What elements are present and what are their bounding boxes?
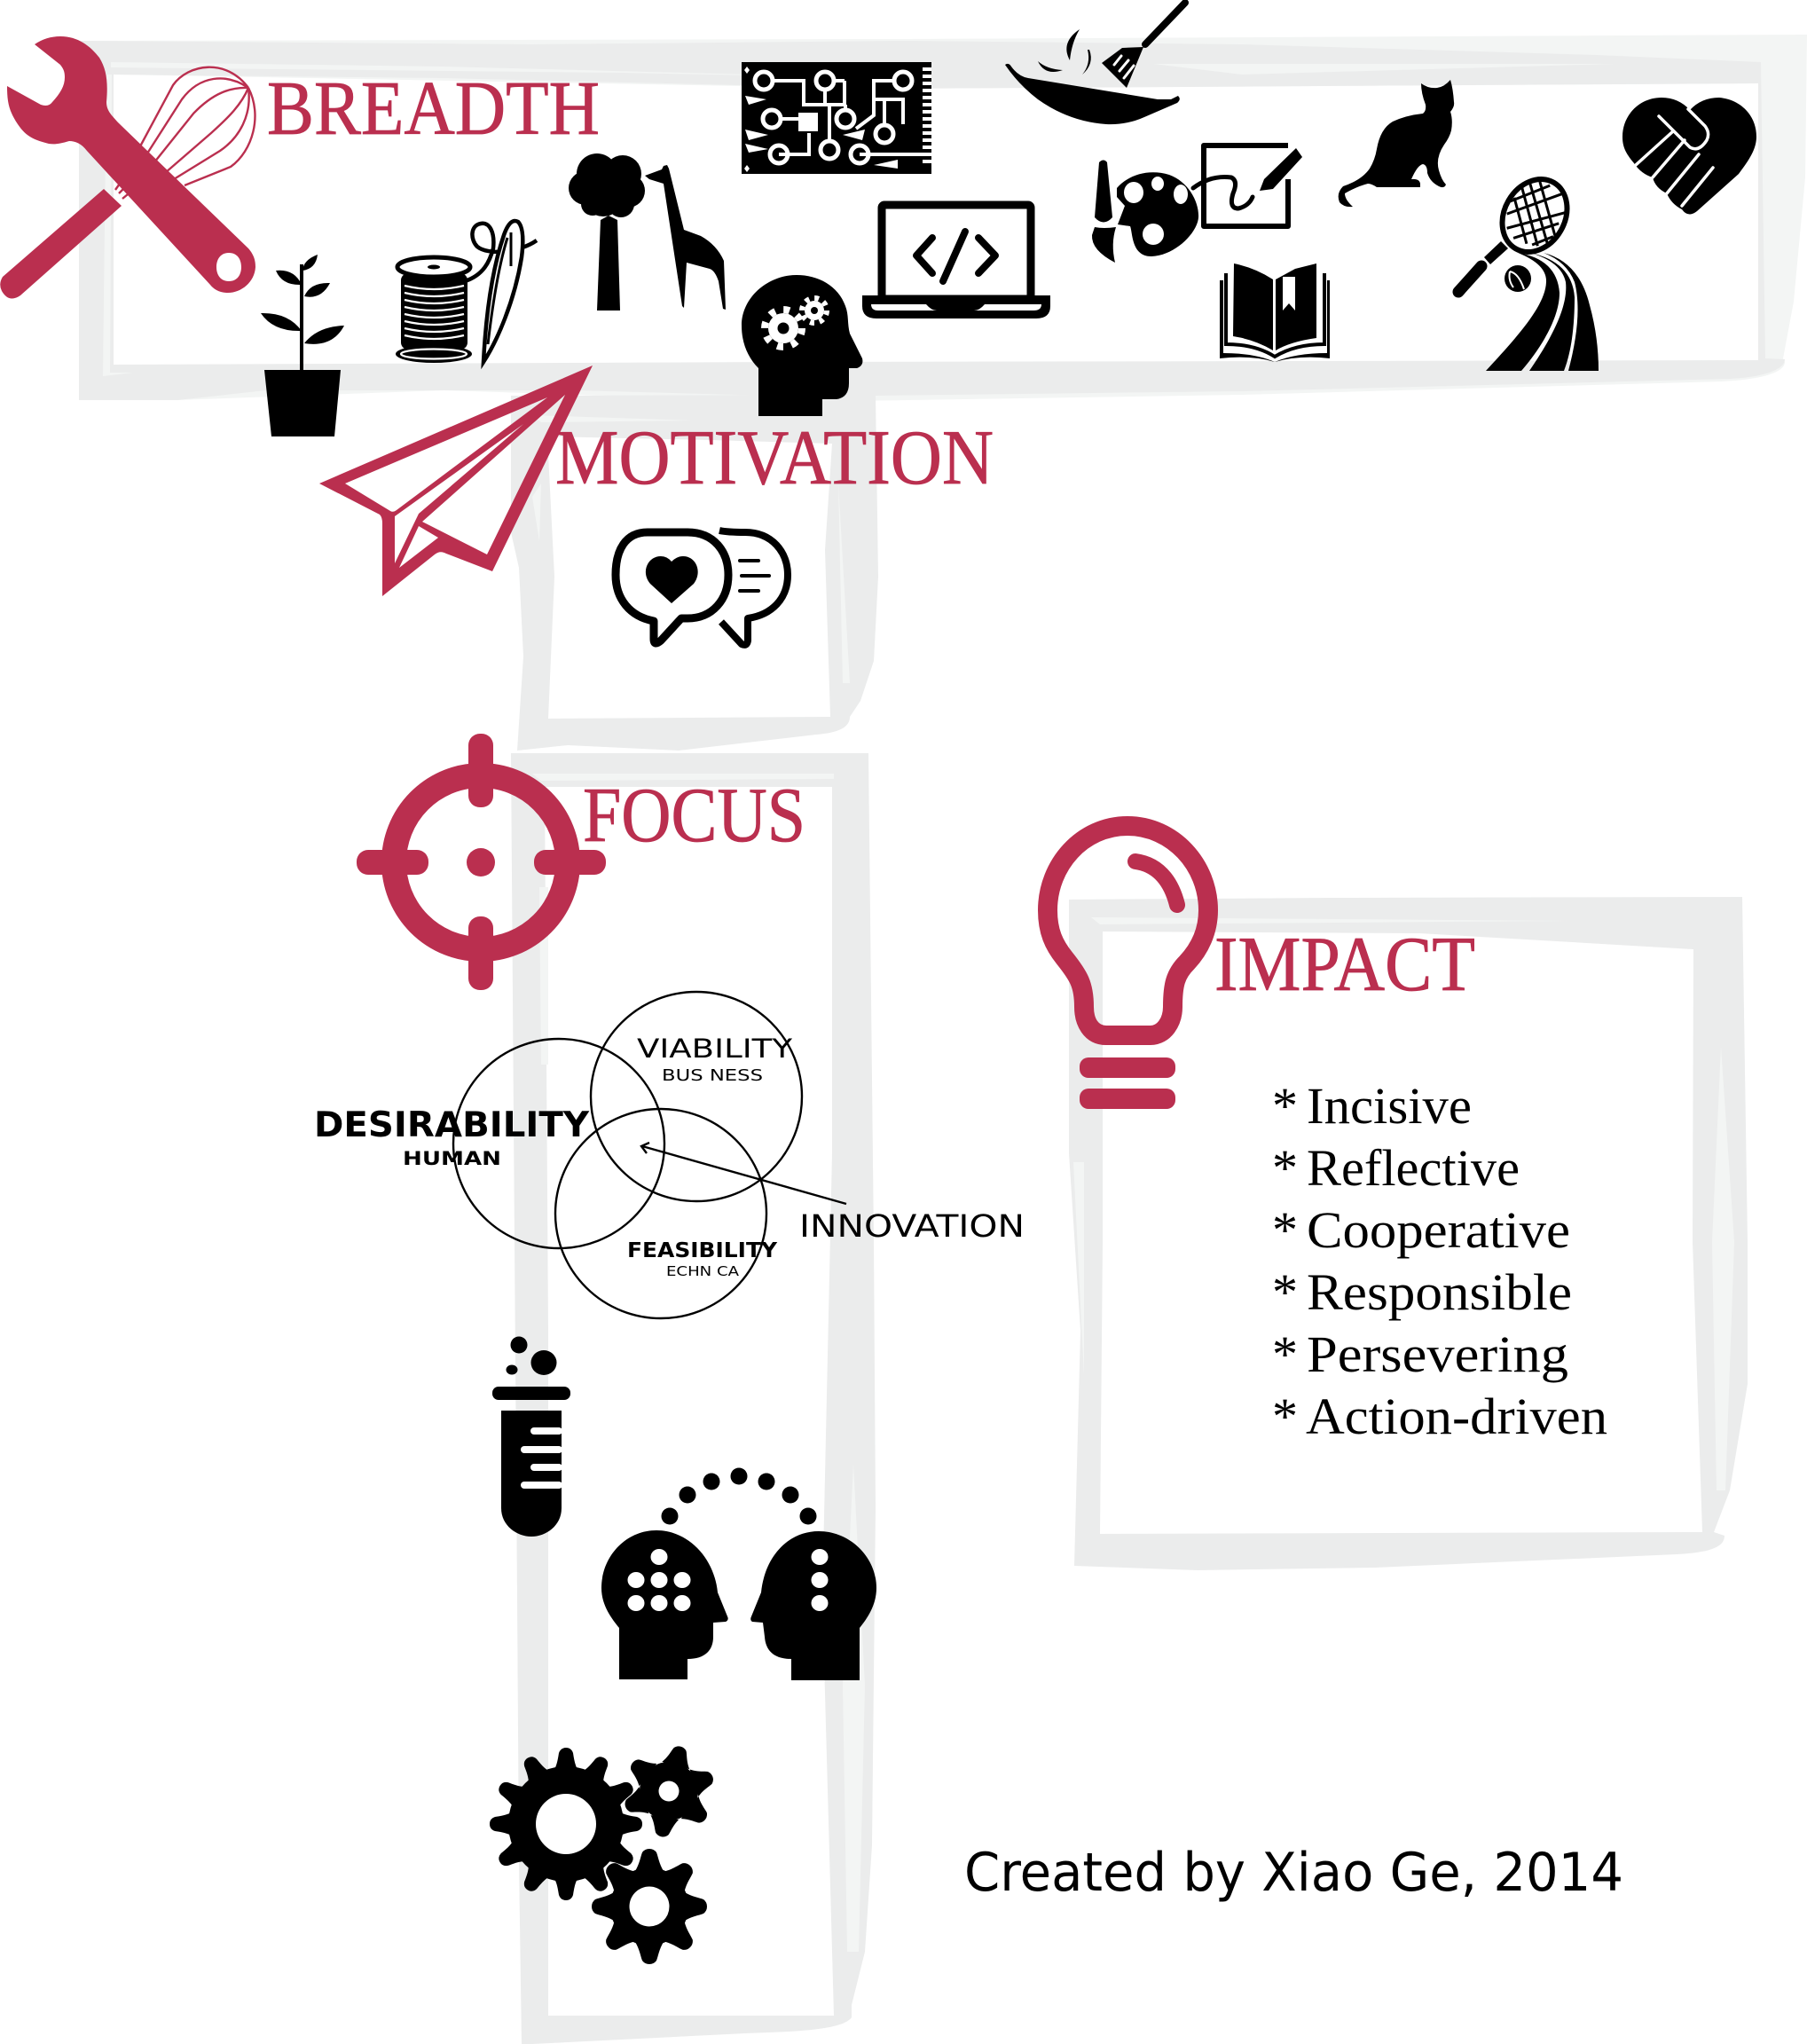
frame: breadth brush-stroke border bbox=[79, 35, 1807, 402]
icon: paper plane bbox=[319, 366, 593, 596]
panel: motivation section content bbox=[319, 366, 994, 645]
label: human: HUMAN bbox=[403, 1148, 501, 1169]
text block: impact traits list: * bbox=[1272, 1263, 1298, 1321]
icon: open book bbox=[1220, 263, 1330, 362]
heading: FOCUS: FOCUS bbox=[583, 773, 805, 859]
chart: innovation venn diagram bbox=[314, 992, 1025, 1318]
icon: three gears bbox=[490, 1743, 717, 1964]
frame: focus brush-stroke border bbox=[511, 753, 876, 2044]
icon: paint palette and brush bbox=[1092, 145, 1302, 263]
icon: giraffe bbox=[645, 165, 726, 310]
heading: MOTIVATION: MOTIVATION bbox=[555, 415, 994, 501]
text block: impact traits list: Action-driven bbox=[1306, 1388, 1607, 1445]
icon: target crosshair bbox=[357, 734, 606, 990]
panel: breadth section content bbox=[0, 3, 1756, 436]
icon: tree bbox=[569, 153, 645, 311]
heading: BREADTH: BREADTH bbox=[267, 65, 600, 151]
heading: IMPACT: IMPACT bbox=[1214, 922, 1475, 1008]
text block: impact traits list: Cooperative bbox=[1307, 1201, 1570, 1259]
icon: head with gears bbox=[742, 275, 862, 416]
icon: test tube bbox=[492, 1336, 570, 1537]
icon: cat silhouette bbox=[1339, 80, 1454, 207]
icon: two heads exchanging ideas bbox=[601, 1467, 876, 1680]
frame: motivation brush-stroke border bbox=[511, 395, 878, 751]
label: technical: ECHN CA bbox=[666, 1263, 740, 1279]
panel: focus section content bbox=[314, 734, 1025, 1964]
text block: impact traits list: Reflective bbox=[1307, 1139, 1520, 1197]
icon: speech bubbles with heart bbox=[616, 531, 788, 645]
label: feasibility: FEASIBILITY bbox=[627, 1239, 777, 1262]
icon: plant in a pot bbox=[261, 255, 344, 436]
text block: impact traits list: * bbox=[1272, 1388, 1298, 1445]
icon: tennis racket and ball bbox=[1458, 168, 1599, 371]
text block: impact traits list: * bbox=[1272, 1201, 1298, 1259]
icon: laptop with code brackets bbox=[862, 205, 1050, 318]
icon: thread spool and needle bbox=[396, 221, 537, 363]
text block: impact traits list: * bbox=[1272, 1325, 1298, 1383]
icon: wok and spatula bbox=[1005, 3, 1185, 124]
label: viability: VIABILITY bbox=[637, 1034, 792, 1064]
credit: author line: Created by Xiao Ge, 2014 bbox=[964, 1842, 1623, 1904]
text block: impact traits list: Incisive bbox=[1307, 1077, 1472, 1135]
label: desirability: DESIRABILITY bbox=[314, 1105, 590, 1145]
panel: impact section content bbox=[1048, 826, 1607, 1445]
icon: light bulb bbox=[1048, 826, 1208, 1109]
text block: impact traits list bbox=[1272, 1077, 1607, 1445]
icon: heart formed by hands bbox=[1622, 98, 1756, 215]
icon: whisk bbox=[0, 67, 255, 299]
text block: impact traits list: * bbox=[1272, 1139, 1298, 1197]
icon: circuit board bbox=[742, 62, 931, 174]
text block: impact traits list: * bbox=[1272, 1077, 1298, 1135]
text block: impact traits list: Responsible bbox=[1307, 1263, 1572, 1321]
frame: impact brush-stroke border bbox=[1069, 897, 1748, 1570]
label: business: BUS NESS bbox=[662, 1066, 763, 1085]
arrow: innovation pointer bbox=[641, 1143, 846, 1204]
icon: wrench bbox=[7, 36, 255, 293]
text block: impact traits list: Persevering bbox=[1307, 1325, 1568, 1383]
label: innovation: INNOVATION bbox=[799, 1209, 1025, 1245]
